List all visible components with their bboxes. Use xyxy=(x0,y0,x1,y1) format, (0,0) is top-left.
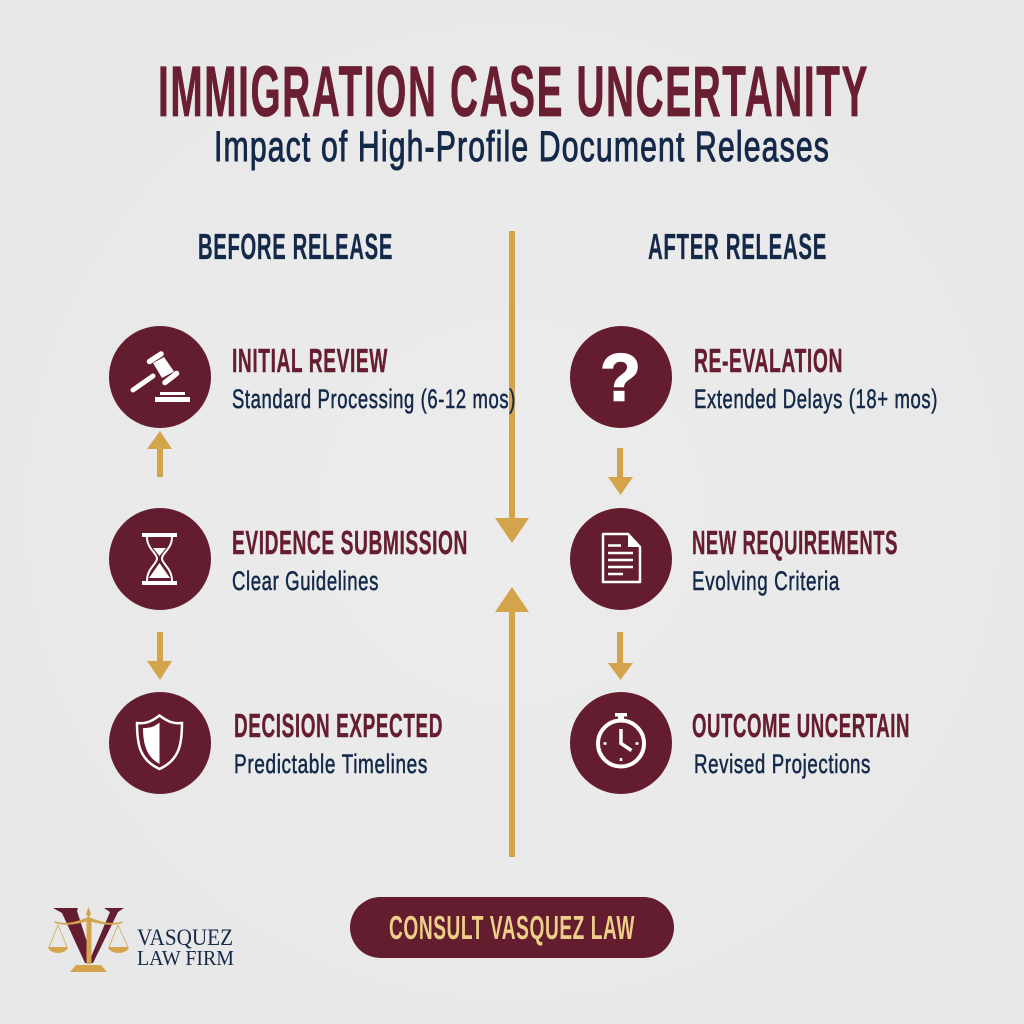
icon: stopwatch xyxy=(570,692,672,794)
text: evolving criteria: Evolving Criteria xyxy=(692,566,840,596)
label: evidence submission: EVIDENCE SUBMISSION xyxy=(232,524,468,561)
icon: document xyxy=(570,508,672,610)
label: decision expected: DECISION EXPECTED xyxy=(234,707,443,744)
icon: hourglass xyxy=(109,508,211,610)
button: consult vasquez law xyxy=(350,897,674,958)
logo text: vasquez: VASQUEZ xyxy=(137,925,233,950)
icon: gavel xyxy=(109,326,211,428)
logo text: law firm: LAW FIRM xyxy=(137,946,234,970)
step: initial review xyxy=(109,326,516,428)
label: initial review: INITIAL REVIEW xyxy=(232,342,388,379)
button: consult vasquez law: CONSULT VASQUEZ LAW xyxy=(389,909,635,946)
step: evidence submission xyxy=(109,508,468,610)
label: re-evalation: RE-EVALATION xyxy=(694,342,843,379)
arrow: down to new requirements xyxy=(608,448,633,495)
arrow: central up arrow xyxy=(495,587,529,857)
logo: vasquez law firm xyxy=(48,907,234,972)
step: outcome uncertain xyxy=(570,692,910,794)
arrow: central down arrow xyxy=(495,231,529,543)
icon: shield xyxy=(109,692,211,794)
step: re-evaluation xyxy=(570,326,938,428)
heading: after release: AFTER RELEASE xyxy=(648,226,827,267)
icon: question mark xyxy=(570,326,672,428)
logo mark: v and scales xyxy=(48,907,129,972)
arrow: down to outcome uncertain xyxy=(608,632,633,680)
arrow: up to initial review xyxy=(147,431,172,477)
text: clear guidelines: Clear Guidelines xyxy=(232,566,379,596)
text: standard processing: Standard Processing (6-12 mos) xyxy=(232,384,516,414)
step: new requirements xyxy=(570,508,898,610)
text: predictable timelines: Predictable Timelines xyxy=(234,749,428,779)
icon: question mark: ? xyxy=(600,340,641,416)
arrow: down to decision expected xyxy=(147,632,172,680)
heading: before release: BEFORE RELEASE xyxy=(198,226,393,267)
text: revised projections: Revised Projections xyxy=(694,749,871,779)
step: decision expected xyxy=(109,692,443,794)
